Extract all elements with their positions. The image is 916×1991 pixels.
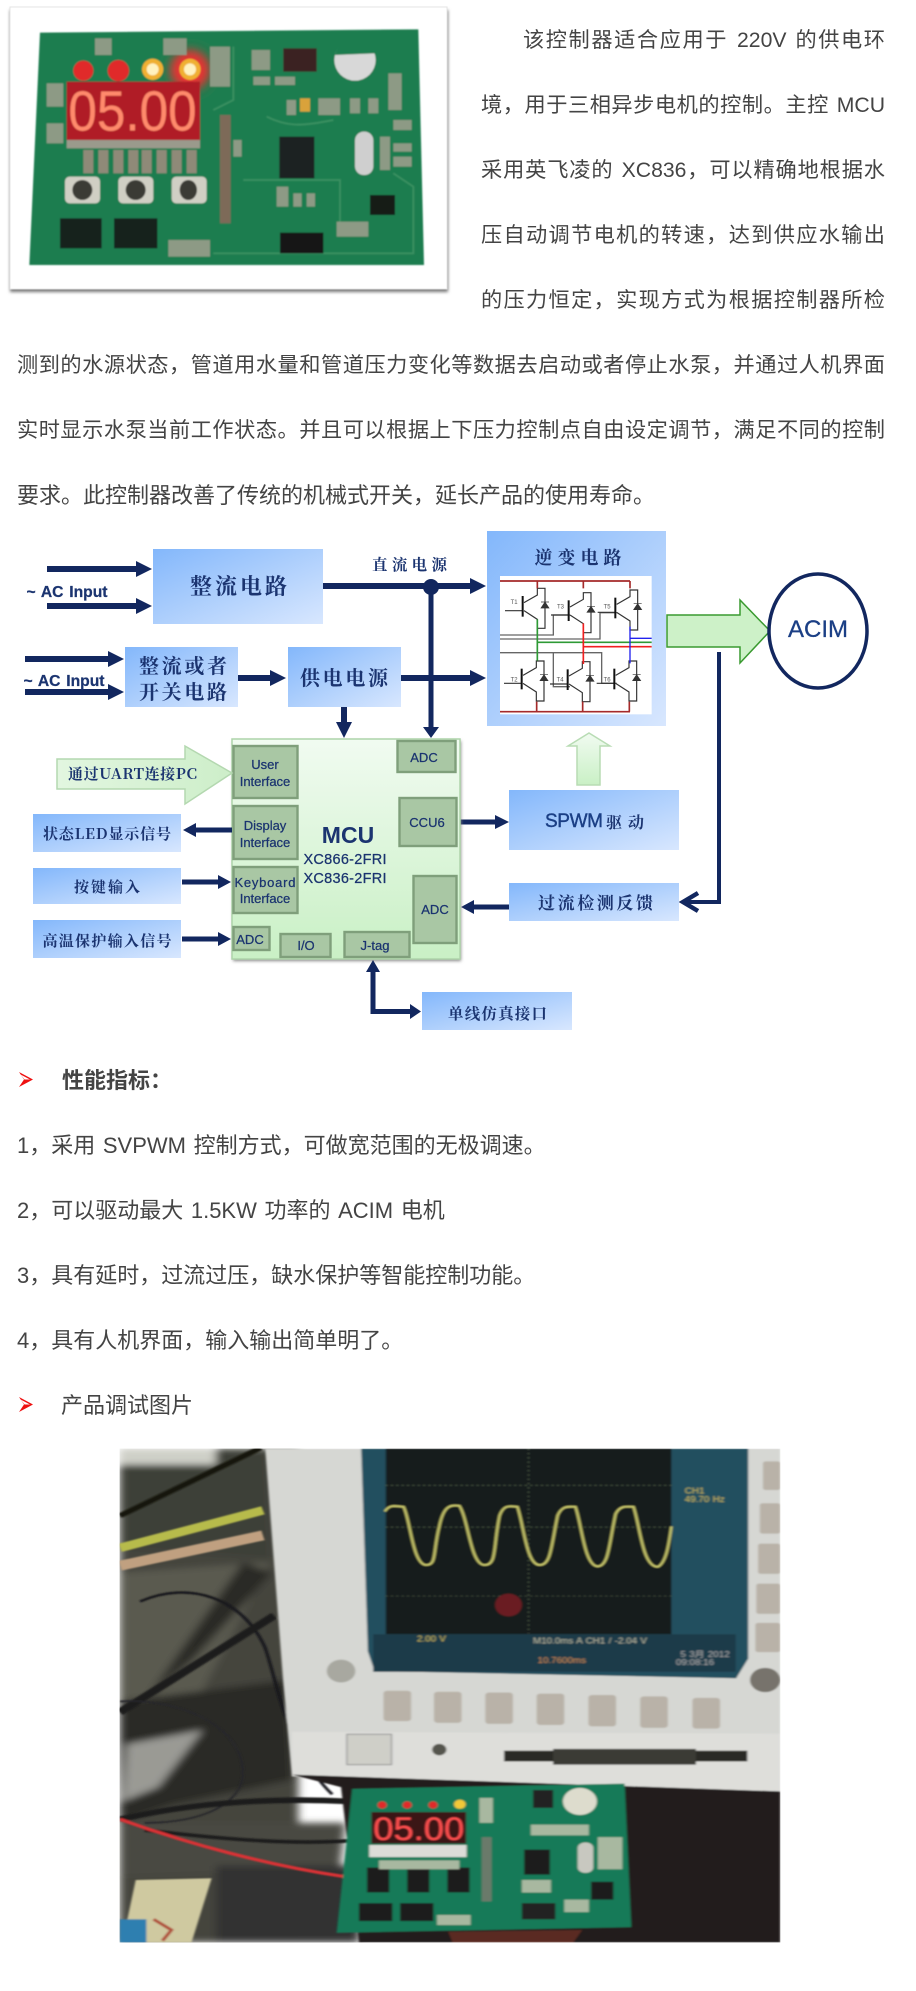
photo: product debugging: 5 3月 2012 xyxy=(680,1650,730,1659)
module: top ADC: ADC xyxy=(410,750,438,765)
text block: intro paragraph: 该控制器适合应用于 220V 的供电环 xyxy=(523,29,885,52)
photo: product debugging xyxy=(120,1448,780,1942)
label: AC input top: ~ AC Input xyxy=(26,584,108,601)
arrow: SPWM to inverter xyxy=(568,733,610,785)
module: keyboard interface: Interface xyxy=(240,891,290,906)
module: small ADC: ADC xyxy=(236,932,264,947)
block: key input xyxy=(33,868,181,904)
arrow: inverter to motor xyxy=(667,600,770,663)
arrow: first AC input pair xyxy=(47,561,152,614)
module: J-tag: J-tag xyxy=(361,938,389,953)
block: SPWM drive: 驱动 xyxy=(606,810,644,833)
module: display interface: Display xyxy=(244,818,287,833)
schematic: inverter bridge: T4 xyxy=(557,677,564,683)
block: status LED signal xyxy=(33,814,181,852)
text block: intro paragraph: 实时显示水泵当前工作状态。并且可以根据上下压力控制点自由设定调节，满足不同的控制 xyxy=(17,419,885,442)
module: CCU6: CCU6 xyxy=(409,815,445,830)
arrow: feedback to ADC xyxy=(461,900,509,914)
block: power supply: 供电电源 xyxy=(300,662,390,691)
arrow: CCU6 to SPWM xyxy=(460,815,509,829)
block: overcurrent feedback: 过流检测反馈 xyxy=(538,889,653,914)
photo: product debugging: 2.00 V xyxy=(417,1634,446,1643)
text block: intro paragraph: 压自动调节电机的转速，达到供应水输出 xyxy=(481,224,885,247)
module: top ADC xyxy=(398,741,456,772)
label: DC power: 直流电源 xyxy=(372,553,448,575)
module: user interface: Interface xyxy=(240,774,290,789)
arrow: J-tag to single wire interface xyxy=(366,960,421,1019)
block: key input: 按键输入 xyxy=(74,876,140,897)
module: small ADC xyxy=(234,927,270,950)
callout: UART link to PC xyxy=(57,746,232,804)
arrow: display interface to LED xyxy=(183,823,232,837)
photo: product debugging: CH1 xyxy=(685,1487,705,1495)
arrow: temperature to ADC xyxy=(182,932,231,946)
module: IO: I/O xyxy=(297,938,315,953)
callout: UART link to PC: 通过UART连接PC xyxy=(68,763,197,784)
photo: controller board xyxy=(10,7,448,292)
block: inverter circuit xyxy=(487,531,666,726)
icon: bullet arrow xyxy=(19,1397,33,1412)
photo: product debugging: M10.0ms A CH1 / -2.04 V xyxy=(533,1637,647,1645)
block: SPWM drive xyxy=(509,790,679,850)
module: right ADC: ADC xyxy=(421,902,449,917)
photo: product debugging: 49.70 Hz xyxy=(685,1495,725,1504)
label: AC input bottom: ~ AC Input xyxy=(24,673,105,690)
text block: spec list: 3，具有延时，过流过压，缺水保护等智能控制功能。 xyxy=(17,1263,535,1288)
block: single wire debug interface: 单线仿真接口 xyxy=(448,1002,547,1024)
motor: ACIM xyxy=(769,574,867,688)
photo: product debugging: 05.00 xyxy=(373,1810,464,1847)
schematic: inverter bridge: T5 xyxy=(604,605,611,611)
text block: intro paragraph xyxy=(17,29,885,508)
arrow: power supply to inverter xyxy=(401,670,486,686)
module: right ADC xyxy=(414,876,456,943)
text block: intro paragraph: 采用英飞凌的 XC836，可以精确地根据水 xyxy=(481,159,885,182)
block: single wire debug interface xyxy=(422,992,572,1030)
block: rectifier or switching circuit: 整流或者 xyxy=(139,650,227,679)
block: rectifier or switching circuit xyxy=(125,647,238,707)
schematic: inverter bridge: T3 xyxy=(557,605,565,611)
motor: ACIM: ACIM xyxy=(788,616,848,643)
flow diagram: block diagram of controller xyxy=(24,531,867,1030)
block: rectifier circuit: 整流电路 xyxy=(190,570,287,601)
block: inverter circuit: 逆变电路 xyxy=(534,544,622,570)
arrow: second AC input pair xyxy=(25,651,124,700)
text block: spec list: 1，采用 SVPWM 控制方式，可做宽范围的无极调速。 xyxy=(17,1133,546,1158)
block: overcurrent feedback xyxy=(509,883,679,921)
module: keyboard interface: Keyboard xyxy=(234,875,296,890)
arrow: current feedback line xyxy=(683,652,719,911)
label: MCU model: MCU xyxy=(322,822,374,848)
label: MCU model: XC866-2FRI xyxy=(304,852,386,868)
photo: product debugging: 09:08:16 xyxy=(676,1658,714,1667)
arrow: DC bus to inverter xyxy=(323,578,486,595)
module: IO xyxy=(280,934,330,957)
heading: performance: 性能指标： xyxy=(62,1068,172,1093)
schematic: inverter bridge: T2 xyxy=(511,677,518,683)
text block: spec list xyxy=(17,1133,546,1353)
block: power supply xyxy=(288,647,401,707)
module: user interface xyxy=(234,746,298,798)
module: keyboard interface xyxy=(234,867,298,913)
block: over-temperature input: 高温保护输入信号 xyxy=(42,930,172,951)
text block: intro paragraph: 的压力恒定，实现方式为根据控制器所检 xyxy=(481,289,885,312)
block: status LED signal: 状态LED显示信号 xyxy=(43,823,171,844)
label: MCU model xyxy=(304,822,386,887)
text block: intro paragraph: 测到的水源状态，管道用水量和管道压力变化等数据去启动或者停止水泵，并通过人机界面 xyxy=(17,354,885,377)
photo: controller board: 05.00 xyxy=(68,81,197,144)
label: MCU model: XC836-2FRI xyxy=(304,871,386,887)
icon: bullet arrow xyxy=(19,1072,33,1087)
module: J-tag xyxy=(344,932,410,957)
module: user interface: User xyxy=(251,757,279,772)
text block: spec list: 4，具有人机界面，输入输出简单明了。 xyxy=(17,1328,403,1353)
module: CCU6 xyxy=(400,798,456,846)
arrow: power supply to MCU xyxy=(336,707,352,738)
text block: intro paragraph: 要求。此控制器改善了传统的机械式开关，延长产品的使用寿命。 xyxy=(17,483,655,508)
block: rectifier circuit xyxy=(153,549,323,624)
panel: MCU xyxy=(232,739,461,961)
schematic: inverter bridge xyxy=(500,576,652,714)
block: rectifier or switching circuit: 开关电路 xyxy=(139,676,227,705)
text block: spec list: 2，可以驱动最大 1.5KW 功率的 ACIM 电机 xyxy=(17,1198,445,1223)
photo: product debugging: 10.7600ms xyxy=(538,1656,587,1665)
arrow: key to keyboard interface xyxy=(182,875,231,889)
module: display interface: Interface xyxy=(240,835,290,850)
schematic: inverter bridge: T1 xyxy=(511,600,518,606)
arrow: switching circuit to power supply xyxy=(238,670,286,686)
arrow: DC bus to ADC xyxy=(423,587,439,738)
text block: intro paragraph: 境，用于三相异步电机的控制。主控 MCU xyxy=(481,94,885,117)
heading: debug photos: 产品调试图片 xyxy=(61,1393,193,1418)
block: SPWM drive: SPWM xyxy=(545,811,603,832)
module: display interface xyxy=(234,806,298,859)
block: over-temperature input xyxy=(33,920,181,958)
schematic: inverter bridge: T6 xyxy=(604,677,611,683)
